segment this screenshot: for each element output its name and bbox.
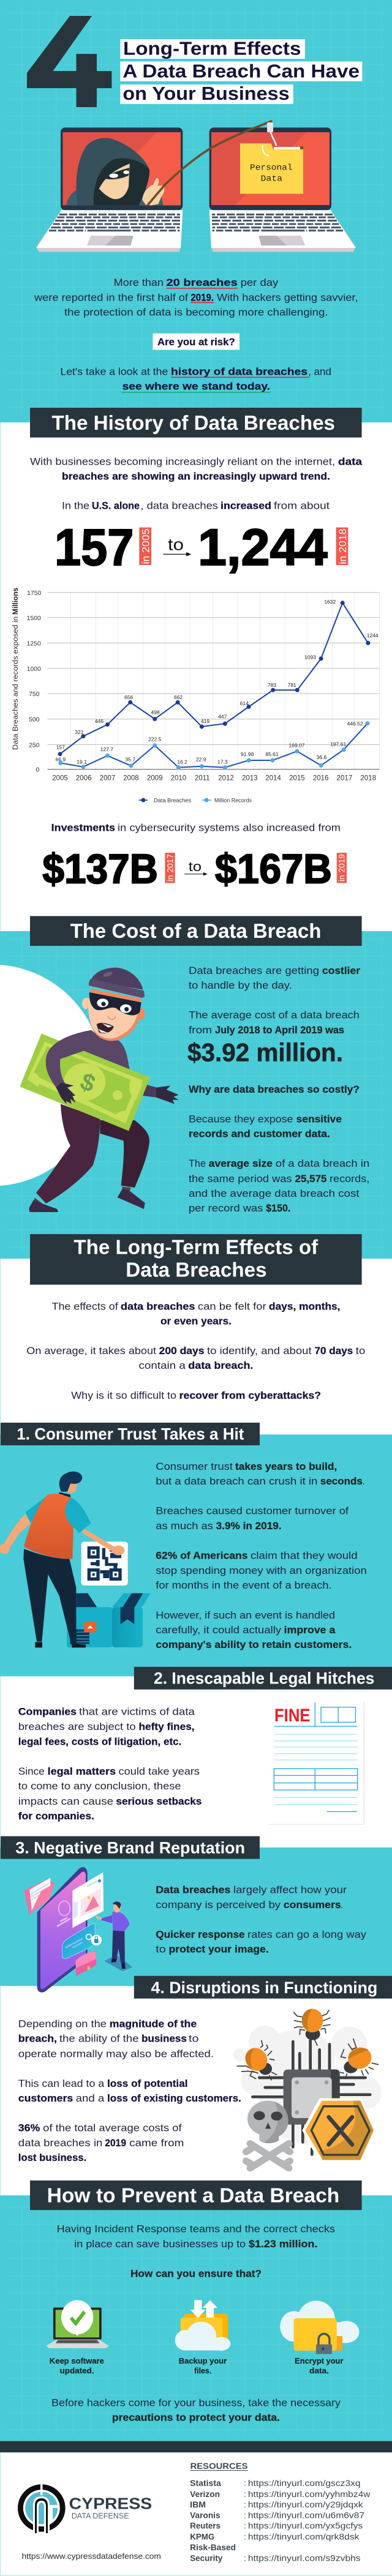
title: on Your Business bbox=[123, 83, 290, 104]
resources list: : bbox=[244, 2490, 246, 2499]
disruptions text: This can lead to a bbox=[18, 2078, 105, 2089]
series: million records: 35.7 bbox=[125, 756, 135, 762]
long-term effects text: 70 days bbox=[315, 1345, 353, 1357]
long-term effects text: contain a bbox=[138, 1360, 186, 1371]
consumer trust text: but a data breach can crush it in bbox=[156, 1475, 317, 1487]
resources list: Reuters bbox=[190, 2522, 221, 2531]
cost text: and the average data breach cost bbox=[189, 1188, 360, 1199]
icon labels: files. bbox=[194, 2367, 211, 2375]
long-term effects text: data breach. bbox=[188, 1360, 254, 1371]
callout: are you at risk: Are you at risk? bbox=[157, 336, 235, 348]
series: data breaches: 662 bbox=[174, 694, 183, 700]
series: million records: 22.9 bbox=[196, 757, 206, 763]
chart y axis labels: 500 bbox=[29, 716, 40, 724]
chart x axis labels: 2005 bbox=[52, 775, 68, 782]
icon: folder backup to cloud bbox=[175, 2300, 230, 2351]
resources list: RESOURCES bbox=[190, 2461, 247, 2471]
long-term effects text: to identify, and about bbox=[207, 1345, 312, 1357]
panel: hero background bbox=[0, 0, 392, 422]
series: data breaches: 419 bbox=[201, 718, 209, 724]
intro text bbox=[34, 277, 358, 318]
chart x axis labels: 2009 bbox=[147, 775, 162, 782]
brand reputation text bbox=[156, 1884, 367, 1955]
chart x axis labels: 2017 bbox=[337, 775, 352, 782]
cost text: Data breaches are getting bbox=[189, 965, 319, 976]
chart x axis labels: 2006 bbox=[76, 775, 91, 782]
consumer trust text: claim that they would bbox=[251, 1549, 358, 1561]
legal text: to come to any conclusion, these bbox=[18, 1780, 181, 1792]
series: million records: 197.61 bbox=[330, 741, 346, 747]
prevention text: Having Incident Response teams and the correct checks bbox=[57, 2223, 335, 2235]
prevention text: $1.23 million. bbox=[249, 2238, 317, 2250]
intro text: history lead-in: history of data breaches bbox=[171, 366, 307, 377]
intro text: history lead-in: Let's take a look at the bbox=[60, 366, 168, 377]
series: data breaches: 656 bbox=[124, 694, 134, 700]
series: million records: 66.9 bbox=[56, 757, 66, 763]
intro text: per day bbox=[241, 277, 279, 288]
disruptions text: breach, bbox=[18, 2033, 57, 2045]
heading: the long-term effects of data breaches bbox=[30, 1234, 362, 1285]
panel: cost background bbox=[0, 931, 392, 1259]
long-term effects text: can be felt for bbox=[198, 1300, 266, 1312]
chart y axis labels: 0 bbox=[36, 766, 39, 774]
resources list: Statista bbox=[190, 2479, 221, 2488]
icon: encrypted folder in cloud bbox=[280, 2301, 360, 2354]
history body text: U.S. alone bbox=[92, 500, 140, 512]
heading: 4. disruptions in functioning: 4. Disruptions in Functioning bbox=[151, 1979, 377, 1997]
heading: how to prevent a data breach: How to Prevent a Data Breach bbox=[47, 2184, 339, 2206]
resources list: https://tinyurl.com/y29jdqxk bbox=[248, 2500, 363, 2509]
resources list: https://tinyurl.com/qrk8dsk bbox=[248, 2532, 360, 2541]
resources list: : bbox=[244, 2511, 246, 2520]
legal text: hefty fines, bbox=[138, 1721, 195, 1732]
disruptions text: magnitude of the bbox=[110, 2018, 197, 2030]
icon labels: Backup your bbox=[179, 2357, 227, 2365]
intro text: history lead-in: see where we stand today. bbox=[123, 381, 270, 392]
series: million records: 127.7 bbox=[100, 746, 113, 752]
brand reputation text: consumers bbox=[284, 1899, 341, 1911]
disruptions text: Depending on the bbox=[18, 2018, 107, 2030]
cost text: to handle by the day. bbox=[189, 979, 292, 991]
chart x axis labels: 2014 bbox=[265, 775, 281, 782]
series: data breaches: 1244 bbox=[367, 632, 379, 638]
cost text: of a data breach in bbox=[276, 1158, 369, 1169]
series: data breaches: 321 bbox=[75, 729, 84, 735]
bugs bbox=[237, 2009, 379, 2080]
series: million records bbox=[56, 721, 370, 769]
brand reputation text: largely affect how your bbox=[233, 1884, 347, 1895]
series: data breaches bbox=[56, 599, 379, 756]
consumer trust text: improve a bbox=[284, 1624, 336, 1636]
illustration: hacker laptop bbox=[36, 127, 183, 252]
heading: the long-term effects of data breaches: Data Breaches bbox=[126, 1258, 267, 1281]
resources list: https://tinyurl.com/yyhmbz4w bbox=[248, 2490, 371, 2499]
closing text: Before hackers come for your business, take the necessary bbox=[51, 2397, 341, 2408]
disruptions text: loss of potential bbox=[107, 2078, 187, 2089]
stat: $137B to $167B: to bbox=[189, 859, 202, 874]
chart legend bbox=[138, 797, 252, 803]
intro text: were reported in the first half of bbox=[34, 291, 188, 304]
chart x axis labels bbox=[52, 775, 376, 782]
resources list: : bbox=[244, 2553, 246, 2563]
chart legend: Million Records bbox=[214, 797, 252, 803]
long-term effects text: The effects of bbox=[51, 1300, 118, 1312]
series: million records: 446.52 bbox=[347, 721, 363, 727]
cost text: July 2018 to April 2019 was bbox=[215, 1024, 344, 1036]
heading: 3. negative brand reputation: 3. Negative Brand Reputation bbox=[15, 1838, 245, 1857]
cost text: records and customer data. bbox=[189, 1128, 330, 1140]
long-term effects text bbox=[26, 1300, 365, 1401]
cost text: per record was bbox=[189, 1202, 263, 1214]
series: million records: 85.61 bbox=[265, 751, 279, 757]
warning sign bbox=[302, 2099, 376, 2163]
white semicircle behind thief bbox=[0, 965, 103, 1186]
logo: cypress data defense: CYPRESS bbox=[69, 2494, 152, 2512]
disruptions text: to bbox=[189, 2033, 198, 2045]
stat: $137B to $167B: in 2017 bbox=[165, 854, 175, 882]
legal text: Companies bbox=[18, 1705, 77, 1718]
consumer trust text: as much as bbox=[156, 1520, 213, 1532]
legal text: impacts can cause bbox=[18, 1795, 113, 1807]
investments text: in cybersecurity systems also increased from bbox=[118, 822, 341, 834]
consumer trust text: However, if such an event is handled bbox=[156, 1609, 335, 1621]
history body text bbox=[30, 455, 363, 512]
series: data breaches: 447 bbox=[218, 714, 227, 720]
history body text: increased bbox=[221, 500, 271, 512]
resources list: : bbox=[244, 2532, 246, 2541]
chart x axis labels: 2012 bbox=[218, 775, 234, 782]
illustration: chip with bugs, skull and warning sign bbox=[233, 2009, 382, 2168]
investments text: Investments bbox=[51, 822, 115, 834]
cost text: The average cost of a data breach bbox=[189, 1009, 360, 1020]
icon labels: Keep software bbox=[50, 2357, 104, 2365]
disruptions text: came from bbox=[129, 2137, 184, 2149]
disruptions text: customers bbox=[18, 2092, 73, 2104]
stat: $137B to $167B bbox=[42, 845, 347, 892]
disruptions text: 2019 bbox=[105, 2137, 126, 2149]
intro text: history lead-in bbox=[60, 366, 331, 393]
closing text: precautions to protect your data. bbox=[112, 2412, 280, 2424]
prevention text bbox=[57, 2223, 335, 2279]
history body text: from about bbox=[274, 500, 330, 512]
long-term effects text: 200 days bbox=[159, 1345, 205, 1357]
disruptions text: and a bbox=[76, 2092, 105, 2104]
intro text: the protection of data is becoming more challenging. bbox=[64, 307, 328, 318]
long-term effects text: Why is it so difficult to bbox=[71, 1390, 176, 1401]
title bbox=[120, 38, 362, 104]
series: million records: 91.98 bbox=[241, 751, 254, 757]
series: data breaches: 157 bbox=[56, 744, 65, 751]
disruptions text: data breaches in bbox=[18, 2137, 102, 2149]
chart y axis labels bbox=[27, 590, 42, 774]
cost text: sensitive bbox=[296, 1113, 342, 1125]
folder: personal data bbox=[240, 143, 303, 193]
heading: 2. inescapable legal hitches: 2. Inescapable Legal Hitches bbox=[154, 1669, 374, 1687]
heading: the history of data breaches: The History of Data Breaches bbox=[51, 411, 335, 434]
brand reputation text: to bbox=[156, 1944, 166, 1955]
history body text: data bbox=[338, 455, 363, 467]
heading: the long-term effects of data breaches: The Long-Term Effects of bbox=[74, 1236, 318, 1259]
series: data breaches: 498 bbox=[151, 709, 160, 715]
series: data breaches: 1093 bbox=[304, 654, 316, 660]
stat: $137B to $167B: in 2019 bbox=[337, 854, 347, 882]
legal text: serious setbacks bbox=[116, 1795, 202, 1807]
consumer trust text: 62% of Americans bbox=[156, 1549, 247, 1561]
legal text bbox=[18, 1705, 202, 1822]
cost text: $150. bbox=[266, 1202, 290, 1214]
panel: prevention background bbox=[0, 2195, 392, 2441]
cost text: the same period was bbox=[189, 1173, 292, 1185]
resources list: Risk-Based bbox=[190, 2543, 236, 2552]
illustration: man with QR code and box bbox=[0, 1472, 151, 1647]
icon labels: Encrypt your bbox=[295, 2357, 344, 2365]
chart legend: Data Breaches bbox=[154, 797, 191, 803]
title: Long-Term Effects bbox=[123, 38, 301, 59]
long-term effects text: On average, it takes about bbox=[26, 1345, 156, 1357]
icon labels: updated. bbox=[60, 2367, 94, 2375]
consumer trust text: Consumer trust bbox=[156, 1461, 233, 1472]
history body text: In the bbox=[62, 500, 89, 512]
disruptions text: loss of existing customers. bbox=[107, 2092, 241, 2104]
chart y axis labels: 1000 bbox=[27, 665, 41, 673]
illustration: phone with isometric man bbox=[24, 1867, 133, 1993]
brand reputation text: . bbox=[341, 1899, 343, 1911]
history body text: , data breaches bbox=[140, 500, 218, 512]
closing text bbox=[51, 2397, 341, 2424]
cost text bbox=[187, 965, 369, 1214]
resources list: : bbox=[244, 2479, 246, 2488]
brand reputation text: Data breaches bbox=[156, 1884, 230, 1895]
disruptions text: operate normally may also be affected. bbox=[18, 2048, 214, 2059]
heading: how to prevent a data breach bbox=[30, 2181, 362, 2210]
series: million records: 169.07 bbox=[289, 742, 305, 748]
stat: $137B to $167B: $167B bbox=[215, 845, 332, 892]
history body text: With businesses becoming increasingly reliant on the internet, bbox=[30, 455, 335, 467]
resources list: https://tinyurl.com/gscz3xq bbox=[248, 2479, 361, 2488]
website url: https://www.cypressdatadefense.com bbox=[22, 2552, 161, 2561]
resources list: : bbox=[244, 2522, 246, 2531]
prevention text: How can you ensure that? bbox=[130, 2267, 262, 2279]
consumer trust text: carefully, it could actually bbox=[156, 1624, 282, 1636]
QR code bbox=[81, 1541, 128, 1586]
cost text: 25,575 bbox=[295, 1173, 327, 1185]
chart axis title: Millions bbox=[12, 588, 20, 615]
chart y axis labels: 250 bbox=[29, 742, 40, 749]
resources list: https://tinyurl.com/u6m6v87 bbox=[248, 2511, 364, 2520]
stat: 157 to 1,244: in 2018 bbox=[337, 528, 349, 564]
icon labels bbox=[50, 2357, 344, 2375]
consumer trust text: 3.9% in 2019. bbox=[216, 1520, 282, 1532]
cost text: $3.92 million. bbox=[187, 1038, 343, 1066]
logo: cypress data defense: DATA DEFENSE bbox=[72, 2511, 129, 2520]
chart y axis labels: 750 bbox=[29, 691, 40, 698]
consumer trust text: for months in the event of a breach. bbox=[156, 1579, 332, 1591]
consumer trust text: seconds bbox=[320, 1475, 363, 1487]
brand reputation text: protect your image. bbox=[169, 1944, 269, 1955]
intro text: 2019. bbox=[190, 291, 214, 304]
resources list: Security bbox=[190, 2553, 223, 2563]
resources list: Varonis bbox=[190, 2511, 221, 2520]
heading: the cost of a data breach: The Cost of a Data Breach bbox=[70, 919, 321, 942]
disruptions text: the ability of the bbox=[59, 2033, 138, 2045]
illustration: fine document: FINE bbox=[274, 1705, 310, 1726]
skull and crossbones bbox=[246, 2101, 290, 2168]
line chart: data breaches and records exposed bbox=[12, 588, 380, 803]
chart x axis labels: 2016 bbox=[313, 775, 328, 782]
chart x axis labels: 2011 bbox=[195, 775, 210, 782]
long-term effects text: to bbox=[356, 1345, 365, 1357]
heading: the history of data breaches bbox=[30, 408, 362, 438]
heading: the cost of a data breach bbox=[30, 916, 362, 946]
brand reputation text: Quicker response bbox=[156, 1929, 245, 1941]
disruptions text bbox=[18, 2018, 241, 2163]
cost text: records, bbox=[330, 1173, 369, 1185]
cost text: Why are data breaches so costly? bbox=[189, 1084, 360, 1095]
cost text: The bbox=[189, 1158, 206, 1169]
series: data breaches: 781 bbox=[288, 682, 296, 688]
stat: 157 to 1,244: in 2005 bbox=[140, 528, 152, 564]
icon: laptop with check mark bbox=[47, 2300, 109, 2348]
resources list: https://tinyurl.com/s9zvbhs bbox=[248, 2553, 361, 2563]
consumer trust text: company's ability to retain customers. bbox=[156, 1639, 352, 1650]
banknote: $ bbox=[77, 1068, 99, 1098]
consumer trust text bbox=[156, 1461, 367, 1650]
long-term effects text: recover from cyberattacks? bbox=[179, 1390, 321, 1401]
banknote bbox=[20, 1033, 150, 1131]
disruptions text: business bbox=[141, 2033, 187, 2045]
series: data breaches: 783 bbox=[268, 682, 276, 688]
folder: personal data: Data bbox=[261, 174, 282, 184]
long-term effects text: data breaches bbox=[121, 1300, 195, 1312]
intro text: With hackers getting savvier, bbox=[217, 291, 358, 304]
intro text: 20 breaches bbox=[166, 277, 238, 288]
resources list: IBM bbox=[190, 2500, 206, 2509]
legal text: legal matters bbox=[48, 1765, 116, 1777]
series: million records: 19.1 bbox=[77, 758, 87, 765]
stat: 157 to 1,244: 1,244 bbox=[198, 519, 328, 576]
disruptions text: 36% bbox=[18, 2122, 40, 2134]
chart x axis labels: 2007 bbox=[100, 775, 115, 782]
panel: consumer trust background bbox=[0, 1434, 392, 1676]
heading: 1. consumer trust takes a hit: 1. Consumer Trust Takes a Hit bbox=[17, 1425, 244, 1443]
callout: are you at risk bbox=[153, 334, 239, 350]
intro text: history lead-in: , and bbox=[308, 366, 331, 377]
resources list: : bbox=[244, 2500, 246, 2509]
stat: 157 to 1,244 bbox=[55, 519, 349, 576]
chart axis title: Data Breaches and records exposed in bbox=[12, 616, 20, 750]
intro text: More than bbox=[114, 277, 164, 288]
disruptions text: lost business. bbox=[18, 2152, 86, 2163]
resources list: https://tinyurl.com/yx5gcfys bbox=[248, 2522, 363, 2531]
panel: brand reputation background bbox=[0, 1848, 392, 1986]
series: data breaches: 1632 bbox=[324, 599, 336, 605]
stat: 157 to 1,244: 157 bbox=[55, 519, 134, 576]
legal text: legal fees, costs of litigation, etc. bbox=[18, 1735, 181, 1747]
illustration: fine document bbox=[268, 1701, 364, 1825]
prevention text: in place can save businesses up to bbox=[74, 2238, 246, 2250]
consumer trust text: . bbox=[363, 1475, 365, 1487]
icon labels: data. bbox=[309, 2367, 329, 2375]
chart x axis labels: 2018 bbox=[360, 775, 376, 782]
legal text: for companies. bbox=[18, 1810, 94, 1822]
chart y axis labels: 1250 bbox=[27, 640, 41, 647]
legal text: breaches are subject to bbox=[18, 1721, 136, 1732]
resources list bbox=[190, 2461, 371, 2563]
chart x axis labels: 2015 bbox=[289, 775, 305, 782]
legal text: Since bbox=[18, 1765, 45, 1777]
chart x axis labels: 2013 bbox=[242, 775, 258, 782]
title: A Data Breach Can Have bbox=[123, 60, 360, 81]
icon: fishing rod and hook bbox=[148, 121, 276, 205]
resources list: Verizon bbox=[190, 2490, 220, 2499]
big numeral 4 bbox=[27, 16, 111, 107]
stat: 157 to 1,244: to bbox=[168, 536, 184, 554]
stat: $137B to $167B: $137B bbox=[42, 845, 158, 892]
long-term effects text: or even years. bbox=[160, 1315, 232, 1327]
series: data breaches: 614 bbox=[240, 700, 249, 706]
cost text: costlier bbox=[322, 965, 360, 976]
chart x axis labels: 2008 bbox=[123, 775, 139, 782]
disruptions text: of the total average costs of bbox=[43, 2122, 182, 2134]
consumer trust text: stop spending money with an organization bbox=[156, 1565, 367, 1576]
chart y axis labels: 1500 bbox=[27, 615, 41, 622]
logo: cypress data defense bbox=[18, 2483, 152, 2534]
series: million records: 16.2 bbox=[177, 758, 187, 765]
series: million records: 17.3 bbox=[217, 758, 228, 765]
consumer trust text: takes years to build, bbox=[235, 1461, 337, 1472]
brand reputation text: company is perceived by bbox=[156, 1899, 281, 1911]
folder: personal data: Personal bbox=[250, 163, 293, 173]
resources list: KPMG bbox=[190, 2532, 214, 2541]
history body text: breaches are showing an increasingly upward trend. bbox=[62, 470, 330, 482]
cost text: average size bbox=[209, 1158, 273, 1169]
illustration: thief with banknote bbox=[20, 968, 179, 1212]
series: data breaches: 446 bbox=[95, 718, 104, 724]
cost text: Because they expose bbox=[189, 1113, 293, 1125]
consumer trust text: Breaches caused customer turnover of bbox=[156, 1505, 349, 1517]
footer band bbox=[0, 2441, 392, 2452]
brand reputation text: rates can go a long way bbox=[247, 1929, 367, 1941]
cost text: from bbox=[189, 1024, 212, 1036]
legal text: that are victims of data bbox=[79, 1705, 195, 1718]
long-term effects text: days, months, bbox=[269, 1300, 341, 1312]
illustration: data laptop with folder bbox=[209, 127, 356, 252]
legal text: could take years bbox=[119, 1765, 200, 1777]
series: million records: 36.6 bbox=[317, 754, 326, 760]
chart x axis labels: 2010 bbox=[171, 775, 186, 782]
chart y axis labels: 1750 bbox=[27, 590, 42, 597]
series: million records: 222.5 bbox=[148, 736, 162, 743]
